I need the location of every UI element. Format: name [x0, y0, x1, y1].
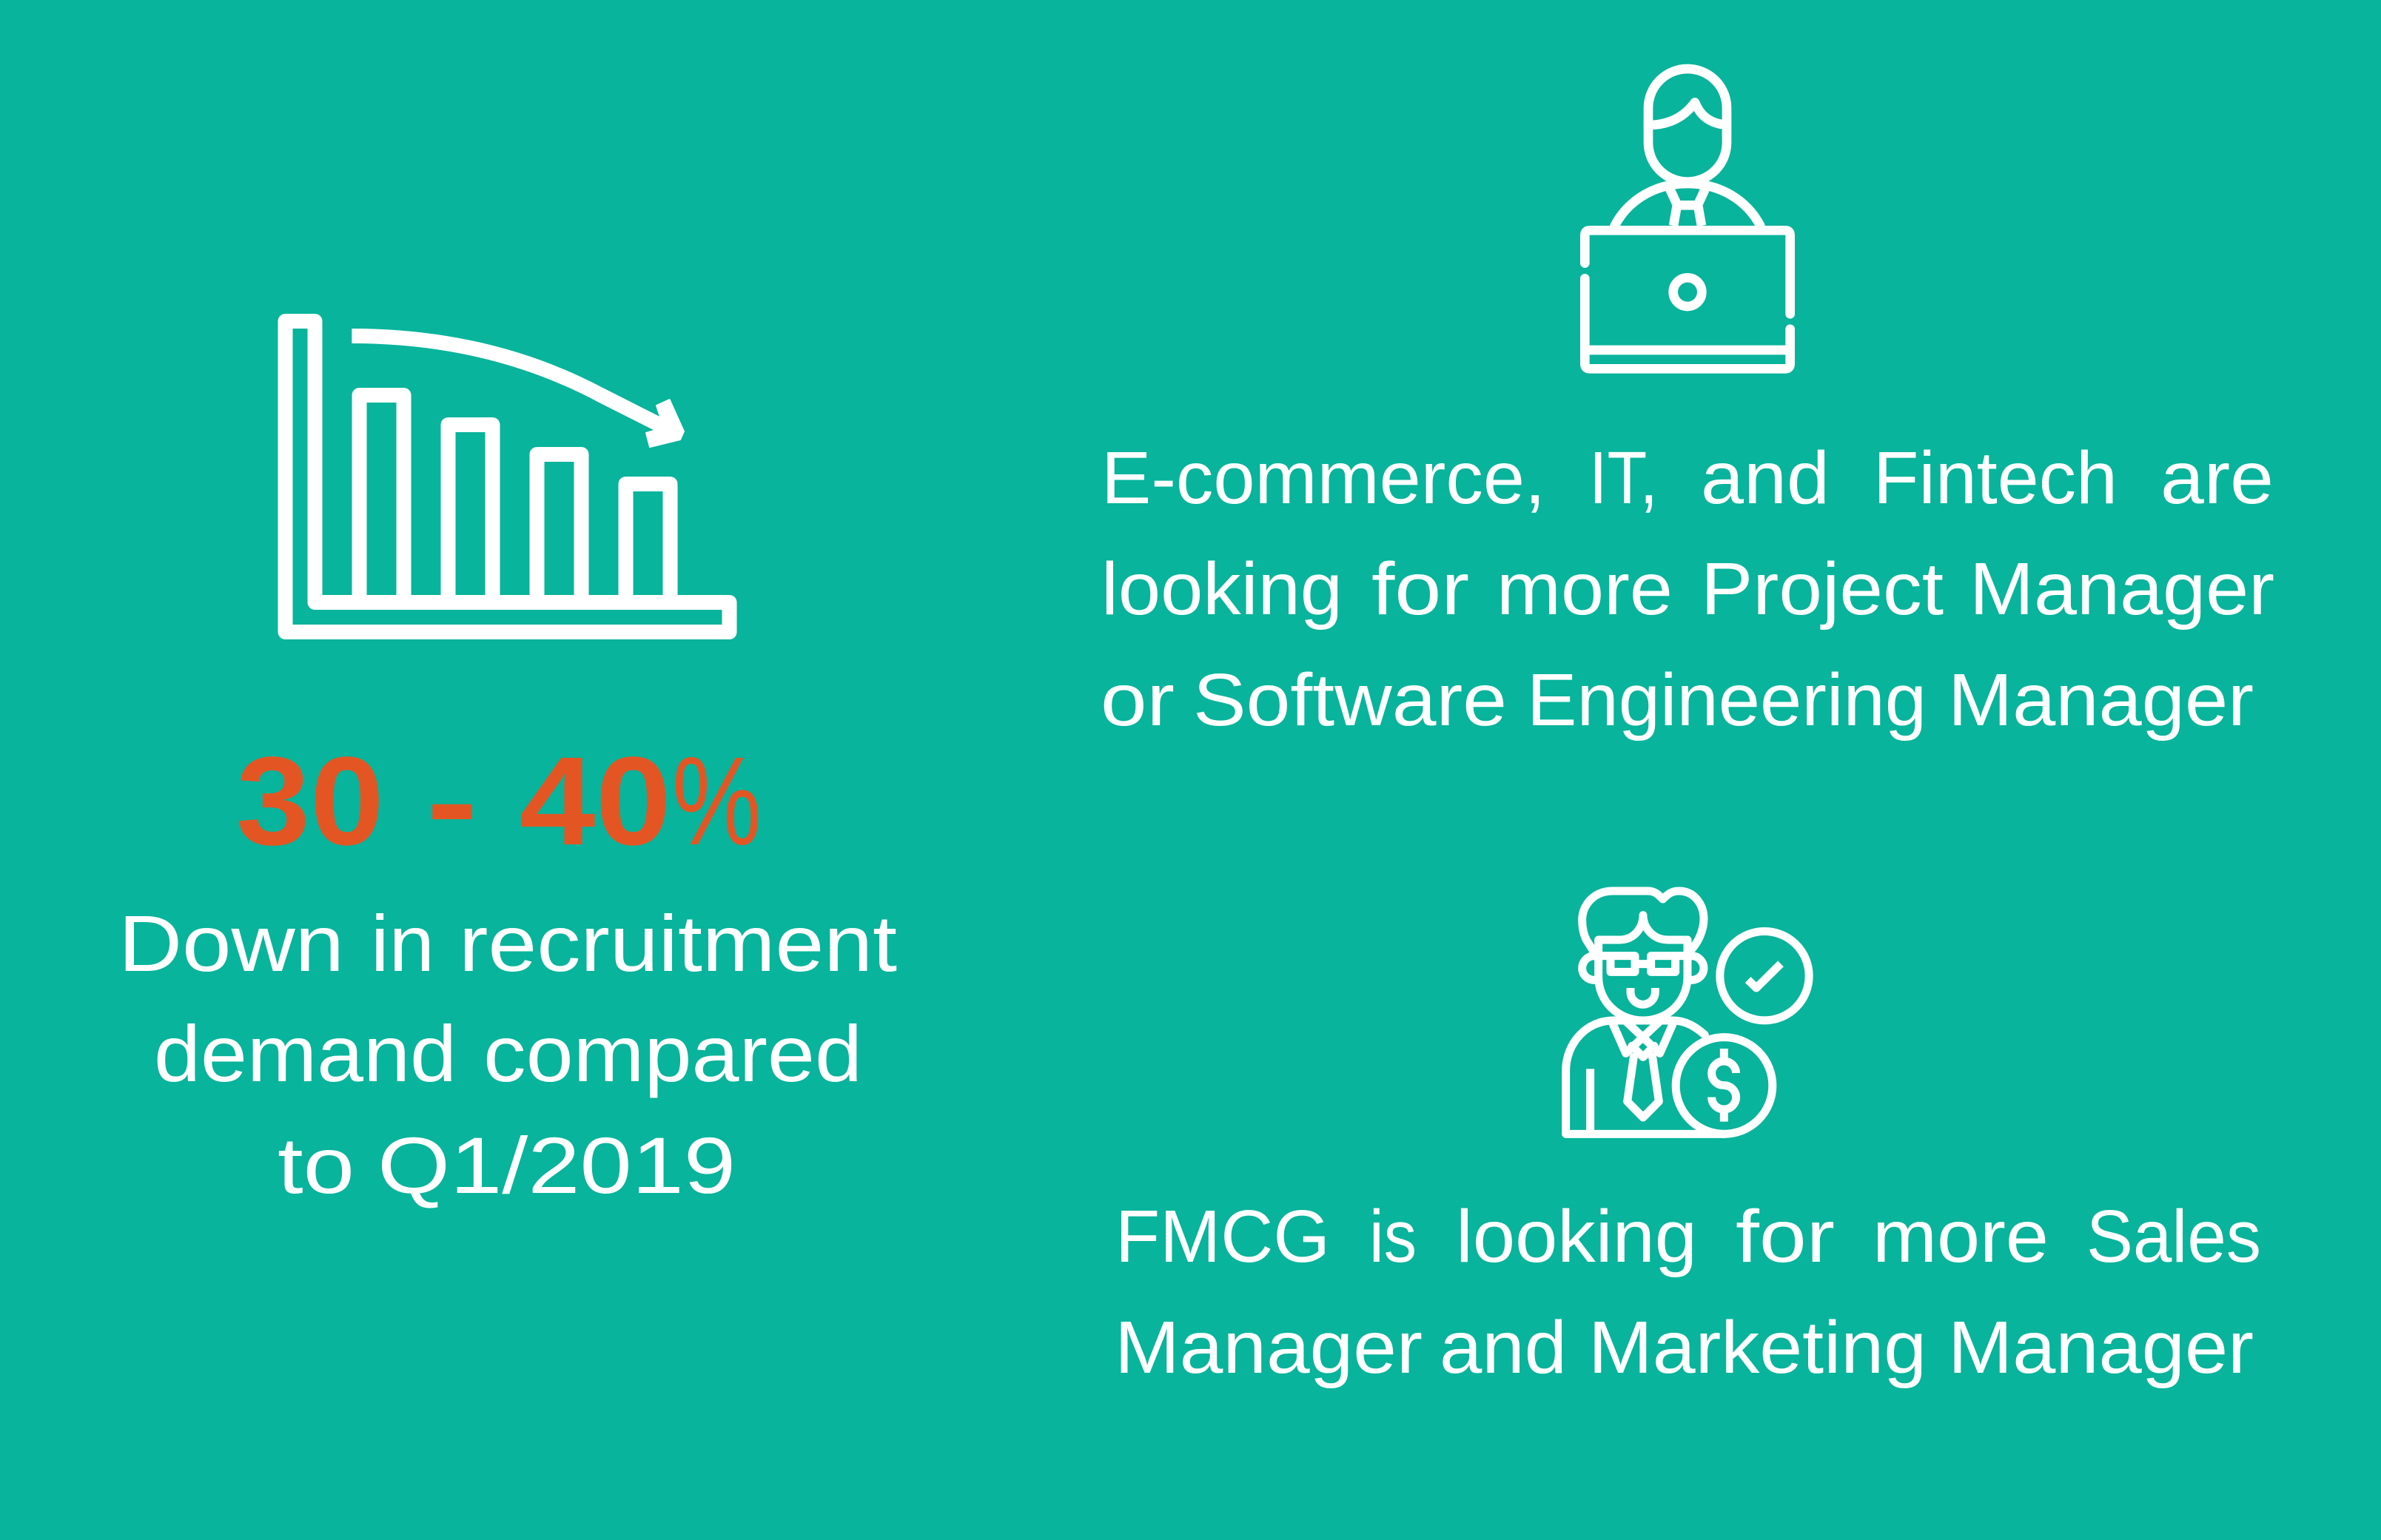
- text: recruitment description: compared: [483, 1009, 862, 1098]
- text: recruitment description: in: [371, 898, 434, 988]
- icon: person at laptop: [1585, 69, 1790, 369]
- text: e-commerce roles: or: [1101, 659, 1175, 742]
- panel: FMCG: [1115, 891, 2261, 1389]
- text: e-commerce roles: Fintech: [1873, 437, 2118, 520]
- text: e-commerce roles: IT,: [1589, 437, 1658, 520]
- text: e-commerce roles: [1101, 437, 2274, 742]
- text: e-commerce roles: Manager: [1969, 548, 2274, 631]
- stat: 30 - 40%: [236, 731, 762, 872]
- text: FMCG roles: [1115, 1195, 2261, 1389]
- text: recruitment description: recruitment: [459, 898, 897, 988]
- text: e-commerce roles: E-commerce,: [1101, 437, 1545, 520]
- text: FMCG roles: more: [1873, 1195, 2049, 1278]
- panel: e-commerce, IT and fintech: [1101, 69, 2274, 742]
- text: FMCG roles: Sales: [2086, 1195, 2261, 1278]
- text: FMCG roles: Marketing: [1588, 1306, 1927, 1389]
- text: recruitment description: [118, 898, 897, 1210]
- text: FMCG roles: and: [1440, 1306, 1567, 1389]
- stat: 30 - 40%: -: [426, 731, 478, 872]
- text: FMCG roles: is: [1369, 1195, 1417, 1278]
- text: FMCG roles: FMCG: [1115, 1195, 1330, 1278]
- icon: manager with coin and check: [1566, 891, 1809, 1134]
- text: recruitment description: Down: [118, 898, 344, 988]
- text: FMCG roles: looking: [1456, 1195, 1697, 1278]
- text: e-commerce roles: looking: [1101, 548, 1343, 631]
- stat: 30 - 40%: 30: [236, 731, 384, 872]
- text: recruitment description: Q1/2019: [377, 1120, 736, 1210]
- text: FMCG roles: Manager: [1115, 1306, 1423, 1389]
- text: FMCG roles: for: [1736, 1195, 1835, 1278]
- text: e-commerce roles: Software: [1193, 659, 1507, 742]
- text: e-commerce roles: for: [1371, 548, 1469, 631]
- text: FMCG roles: Manager: [1948, 1306, 2254, 1389]
- text: recruitment description: to: [278, 1120, 355, 1210]
- text: recruitment description: demand: [154, 1009, 457, 1098]
- text: e-commerce roles: are: [2160, 437, 2274, 520]
- icon: declining bar chart: [286, 321, 730, 632]
- text: e-commerce roles: more: [1497, 548, 1673, 631]
- text: e-commerce roles: Manager: [1948, 659, 2254, 742]
- stat: 30 - 40%: 40: [520, 731, 671, 872]
- panel: recruitment decline: [118, 321, 897, 1210]
- text: e-commerce roles: and: [1701, 437, 1830, 520]
- stat: 30 - 40%: %: [672, 731, 762, 872]
- text: e-commerce roles: Project: [1701, 548, 1944, 631]
- text: e-commerce roles: Engineering: [1527, 659, 1927, 742]
